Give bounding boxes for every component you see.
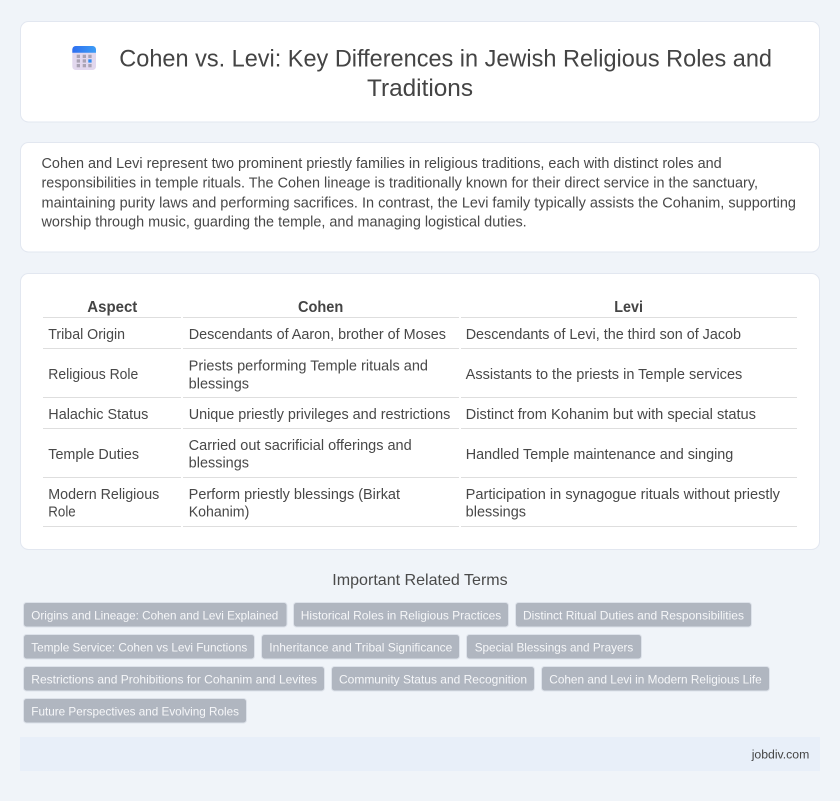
intro paragraph: maintaining purity laws and performing sacrifices. In contrast, the Levi family typically assists the Cohanim, supporting: [42, 196, 796, 212]
tag: Inheritance and Tribal Significance: [269, 640, 453, 654]
row: halachic status: Halachic Status: [48, 407, 148, 423]
tag: [24, 666, 324, 691]
tag: Cohen and Levi in Modern Religious Life: [549, 672, 762, 686]
row: tribal origin: Tribal Origin: [48, 327, 125, 343]
table header: Cohen: [298, 299, 343, 316]
tag: [24, 634, 254, 659]
tag: [294, 602, 508, 627]
tag: Distinct Ritual Duties and Responsibilities: [523, 608, 744, 622]
intro paragraph: responsibilities in temple rituals. The Cohen lineage is traditionally known for their direct service in the sanctuary,: [42, 176, 758, 192]
row: modern religious role: Participation in synagogue rituals without priestly: [466, 487, 781, 503]
tag: Special Blessings and Prayers: [475, 640, 633, 654]
tag: [24, 602, 287, 627]
related term tags: [24, 602, 770, 723]
intro paragraph: Cohen and Levi represent two prominent priestly families in religious traditions, each with distinct roles and: [42, 156, 722, 172]
tag: Future Perspectives and Evolving Roles: [31, 704, 239, 718]
row: modern religious role: Perform priestly blessings (Birkat: [189, 487, 400, 503]
tag: [542, 666, 770, 691]
heading: important related terms: Important Related Terms: [332, 572, 508, 589]
tag: Historical Roles in Religious Practices: [301, 608, 501, 622]
row: halachic status: Unique priestly privileges and restrictions: [189, 407, 450, 423]
row: modern religious role: [48, 487, 781, 521]
table header: [87, 299, 643, 316]
row: tribal origin: [48, 327, 741, 343]
tag: Temple Service: Cohen vs Levi Functions: [31, 640, 247, 654]
row: tribal origin: Descendants of Aaron, brother of Moses: [189, 327, 446, 343]
row: religious role: [48, 359, 742, 392]
tag: Restrictions and Prohibitions for Cohanim and Levites: [31, 672, 317, 686]
tag: [262, 634, 460, 659]
tag: Community Status and Recognition: [339, 672, 527, 686]
header panel: [20, 22, 820, 122]
intro paragraph: [40, 156, 796, 231]
row: halachic status: [48, 407, 756, 423]
row: temple duties: blessings: [189, 456, 249, 472]
row: tribal origin: Descendants of Levi, the third son of Jacob: [466, 327, 741, 343]
row: religious role: Religious Role: [48, 367, 138, 383]
panel: comparison table: [20, 274, 820, 550]
row: religious role: blessings: [189, 376, 249, 392]
row: religious role: Priests performing Temple rituals and: [189, 359, 428, 375]
tag: [332, 666, 534, 691]
row: modern religious role: blessings: [466, 505, 526, 521]
title: Cohen vs. Levi: Key Differences in Jewish Religious Roles and: [119, 46, 772, 73]
footer bar: jobdiv.com: [751, 747, 809, 761]
row: temple duties: Carried out sacrificial offerings and: [189, 438, 412, 454]
footer bar: [20, 737, 820, 771]
row: modern religious role: Role: [48, 505, 76, 521]
title: Traditions: [367, 75, 473, 102]
row: modern religious role: Modern Religious: [48, 487, 159, 503]
tag: [466, 634, 642, 659]
row: temple duties: Temple Duties: [48, 447, 139, 463]
title: [119, 46, 772, 102]
intro paragraph: worship through music, guarding the temple, and managing logistical duties.: [40, 215, 527, 231]
row: temple duties: Handled Temple maintenance and singing: [466, 447, 733, 463]
tag: Origins and Lineage: Cohen and Levi Explained: [31, 608, 278, 622]
row: religious role: Assistants to the priests in Temple services: [466, 367, 742, 383]
row: temple duties: [48, 438, 733, 472]
table header: Aspect: [87, 299, 138, 316]
table header: Levi: [614, 299, 643, 316]
panel: introduction: [20, 142, 820, 252]
row: modern religious role: Kohanim): [189, 505, 249, 521]
row: halachic status: Distinct from Kohanim but with special status: [466, 407, 756, 423]
icon: calendar: [72, 46, 96, 70]
tag: [24, 698, 246, 723]
tag: [516, 602, 752, 627]
